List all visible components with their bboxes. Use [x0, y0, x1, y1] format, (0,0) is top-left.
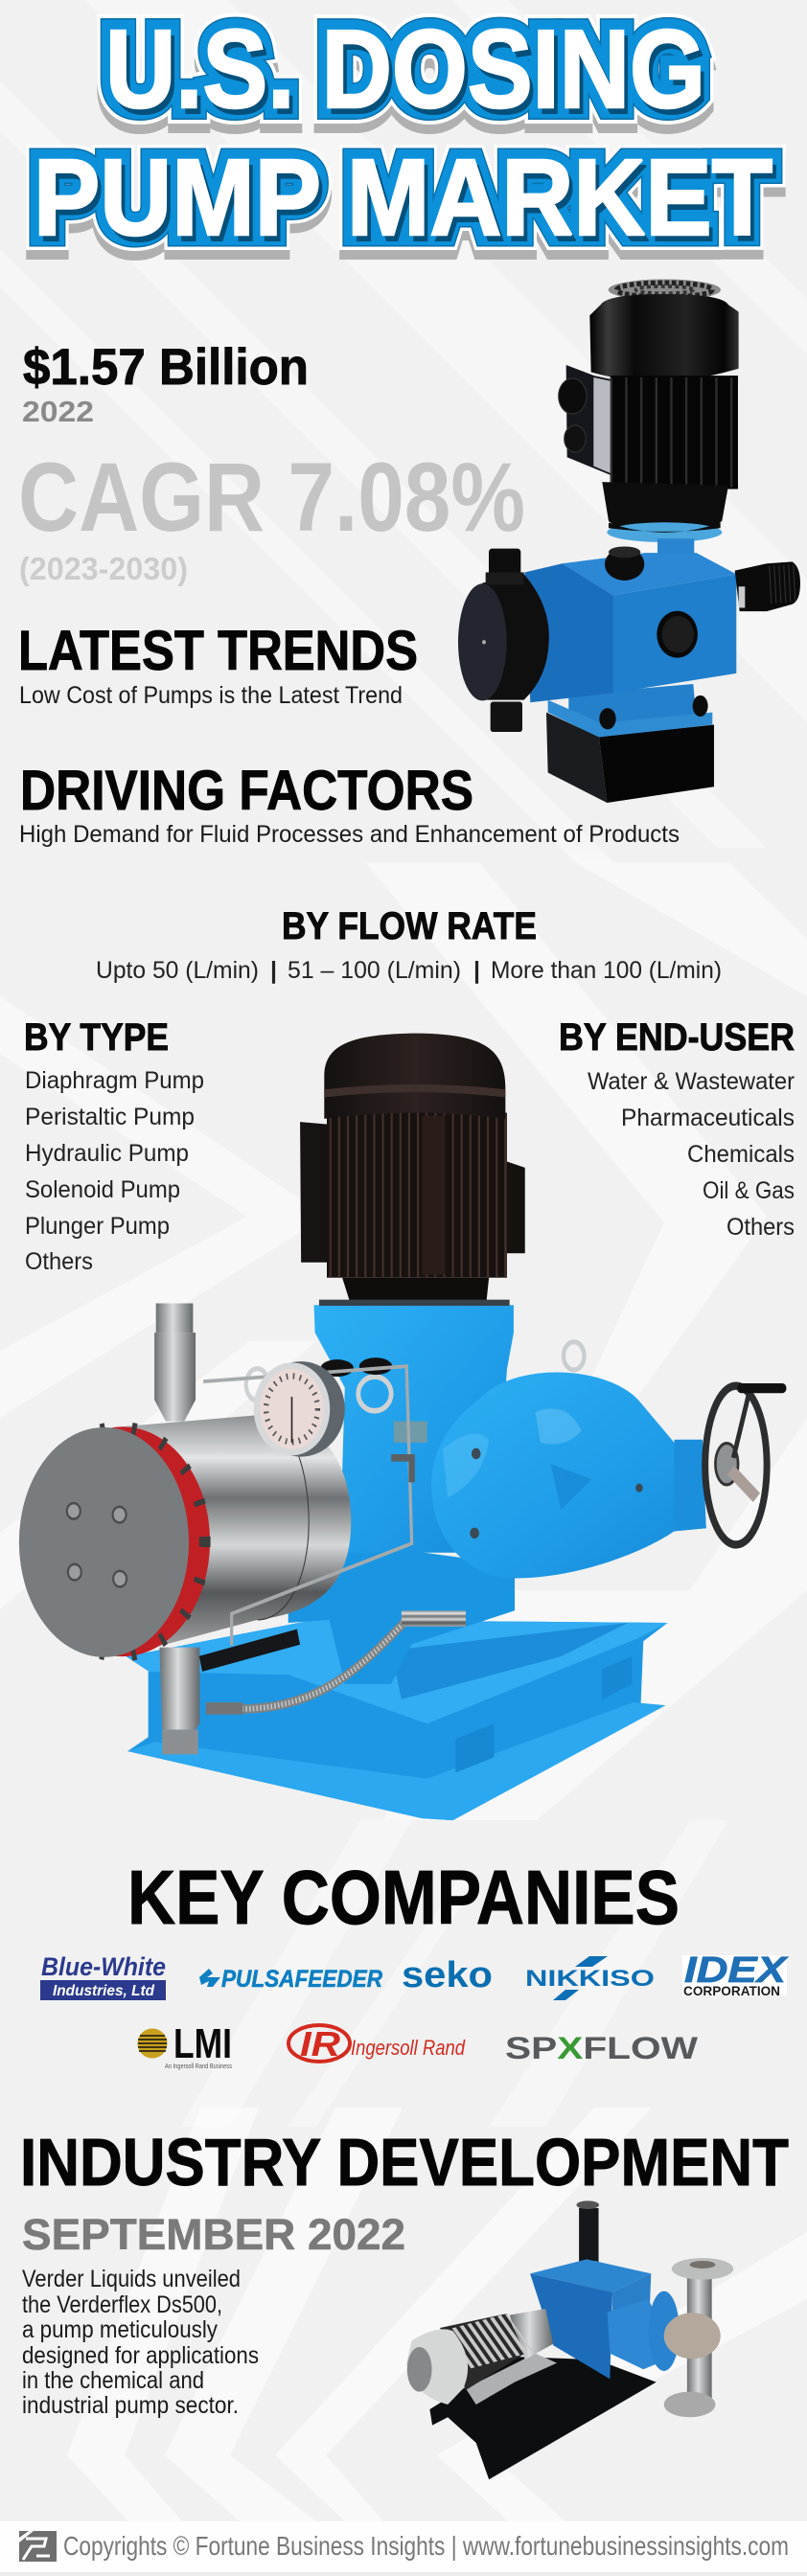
- logo: Nikkiso: [525, 1956, 655, 2000]
- flow rate values: |: [270, 957, 277, 984]
- handwheel: [674, 1386, 782, 1544]
- development date: SEPTEMBER 2022: [22, 2210, 405, 2259]
- logo: Seko: seko: [402, 1955, 493, 1995]
- logo: Ingersoll Rand: Ingersoll Rand: [351, 2036, 466, 2060]
- pressure gauge: [254, 1361, 345, 1457]
- fittings: [489, 549, 520, 579]
- cap nut: [605, 548, 644, 581]
- list of end users: Water & Wastewater: [588, 1068, 795, 1095]
- list of types: Plunger Pump: [25, 1213, 170, 1240]
- pump foot: [288, 1535, 515, 1684]
- logo: Blue-White: Blue-White: [41, 1952, 166, 1981]
- black circular plug: [657, 611, 698, 658]
- red ring: [35, 1426, 210, 1656]
- list of types: Others: [25, 1248, 93, 1275]
- development description: the Verderflex Ds500,: [22, 2291, 222, 2318]
- heading: BY FLOW RATE: [282, 905, 537, 947]
- pedestal: [568, 684, 697, 734]
- icon: Verderflex pump: [406, 2200, 733, 2479]
- motor: [300, 1034, 525, 1302]
- flow rate values: 51 – 100 (L/min): [288, 957, 461, 984]
- flange top: [319, 1300, 510, 1306]
- logo: Fortune Business Insights: [19, 2531, 57, 2562]
- flow rate values: |: [473, 957, 480, 984]
- list of end users: Chemicals: [687, 1141, 795, 1168]
- development description: industrial pump sector.: [22, 2392, 239, 2419]
- latest trends text: Low Cost of Pumps is the Latest Trend: [19, 682, 403, 709]
- heading: key companies: KEY COMPANIES: [127, 1855, 680, 1940]
- list of end users: [588, 1068, 795, 1241]
- base block: [548, 700, 712, 738]
- title line: U.S. DOSING: U.S. DOSING: [109, 12, 709, 137]
- logo: Blue-White: Industries, Ltd: [53, 1983, 155, 1999]
- main blue housing: [431, 1373, 706, 1579]
- shaft coupling: [510, 2309, 553, 2359]
- footer: [19, 2531, 789, 2562]
- driving factors text: High Demand for Fluid Processes and Enhancement of Products: [19, 821, 680, 848]
- heading: BY TYPE: [24, 1016, 169, 1059]
- motor foot: [466, 2354, 557, 2405]
- eye bolts: [564, 1342, 584, 1370]
- title line: U.S. DOSING: U.S. DOSING: [105, 7, 705, 131]
- logo: IDEX: IDEX: [684, 1950, 789, 1991]
- logo: LMI: LMI: [173, 2020, 232, 2067]
- black high pressure pipe: [200, 1637, 298, 1664]
- logo: SPX Flow: SP XFLOW: [505, 2031, 699, 2065]
- title line: U.S. DOSING: U.S. DOSING: [105, 16, 705, 141]
- development description: a pump meticulously: [22, 2316, 218, 2343]
- CAGR period: (2023-2030): [19, 551, 188, 586]
- logo: IDEX: CORPORATION: [683, 1983, 780, 1998]
- market size value: $1.57 Billion: [23, 339, 309, 396]
- upper valve column: [154, 1303, 196, 1422]
- neck housing: [314, 1305, 514, 1553]
- section: by flow rate: [96, 905, 722, 984]
- logo: Nikkiso: NIKKISO: [525, 1966, 655, 1992]
- flow rate values: More than 100 (L/min): [491, 957, 722, 984]
- black caps: [321, 1359, 354, 1377]
- blue pump flange: [608, 2299, 674, 2369]
- company logos: [40, 1950, 789, 2070]
- logo: Pulsafeeder: PULSAFEEDER: [221, 1966, 382, 1993]
- heading: driving factors: DRIVING FACTORS: [20, 760, 473, 822]
- market size year: 2022: [22, 395, 94, 428]
- CAGR value: CAGR 7.08%: [18, 443, 525, 552]
- base frame: [127, 1620, 667, 1820]
- list of end users: Others: [726, 1214, 795, 1241]
- list of types: Solenoid Pump: [25, 1176, 180, 1203]
- logo: IDEX: [682, 1950, 789, 1998]
- development description: [22, 2266, 259, 2419]
- cylinder end disk: [19, 1427, 189, 1657]
- list of end users: Oil & Gas: [703, 1177, 795, 1204]
- list of types: Diaphragm Pump: [25, 1067, 204, 1094]
- lower valve column: [159, 1648, 199, 1754]
- adjustment knob: [735, 561, 800, 611]
- heading: latest trends: LATEST TRENDS: [18, 620, 418, 682]
- section: by type: [24, 1016, 204, 1275]
- diaphragm head: [482, 574, 549, 700]
- logo: Ingersoll Rand: [288, 2024, 466, 2063]
- tubing: [203, 1366, 412, 1646]
- gear box: [563, 553, 736, 596]
- black base: [429, 2357, 657, 2479]
- blue gear box: [530, 2259, 651, 2292]
- title line: U.S. DOSING: U.S. DOSING: [105, 7, 705, 131]
- flow rate values: [96, 957, 722, 984]
- list of end users: Pharmaceuticals: [621, 1105, 795, 1131]
- development description: designed for applications: [22, 2342, 259, 2369]
- logo: Blue-White: [40, 1952, 166, 2000]
- list of types: Peristaltic Pump: [25, 1104, 195, 1130]
- blue ring: [607, 522, 722, 542]
- logo: LMI: An Ingersoll Rand Business: [165, 2063, 232, 2070]
- icon: small dosing pump: [458, 279, 800, 803]
- list of types: [25, 1067, 204, 1275]
- flow rate values: Upto 50 (L/min): [96, 957, 259, 984]
- development description: Verder Liquids unveiled: [22, 2266, 241, 2292]
- rod: [579, 2208, 599, 2263]
- title line: U.S. DOSING: U.S. DOSING: [105, 7, 705, 131]
- logo: Ingersoll Rand: IR: [300, 2024, 340, 2063]
- pump head: [664, 2313, 721, 2359]
- steel cylinder: [113, 1415, 351, 1652]
- motor end: [406, 2329, 468, 2405]
- discharge pipe: [687, 2277, 712, 2398]
- section: by end-user: [559, 1016, 795, 1241]
- motor fins: [440, 2314, 525, 2390]
- logo: LMI: [138, 2020, 232, 2070]
- bell housing: [602, 482, 728, 535]
- motor cap: [589, 294, 739, 381]
- list of types: Hydraulic Pump: [25, 1140, 189, 1167]
- title: [34, 7, 776, 267]
- development description: in the chemical and: [22, 2367, 204, 2394]
- terminal bracket: [566, 365, 611, 475]
- braided hose: [242, 1620, 406, 1709]
- motor fins: [611, 376, 738, 489]
- fan grill: [609, 279, 721, 301]
- title line: U.S. DOSING: U.S. DOSING: [105, 7, 705, 131]
- icon: large dosing pump: [19, 1034, 782, 1820]
